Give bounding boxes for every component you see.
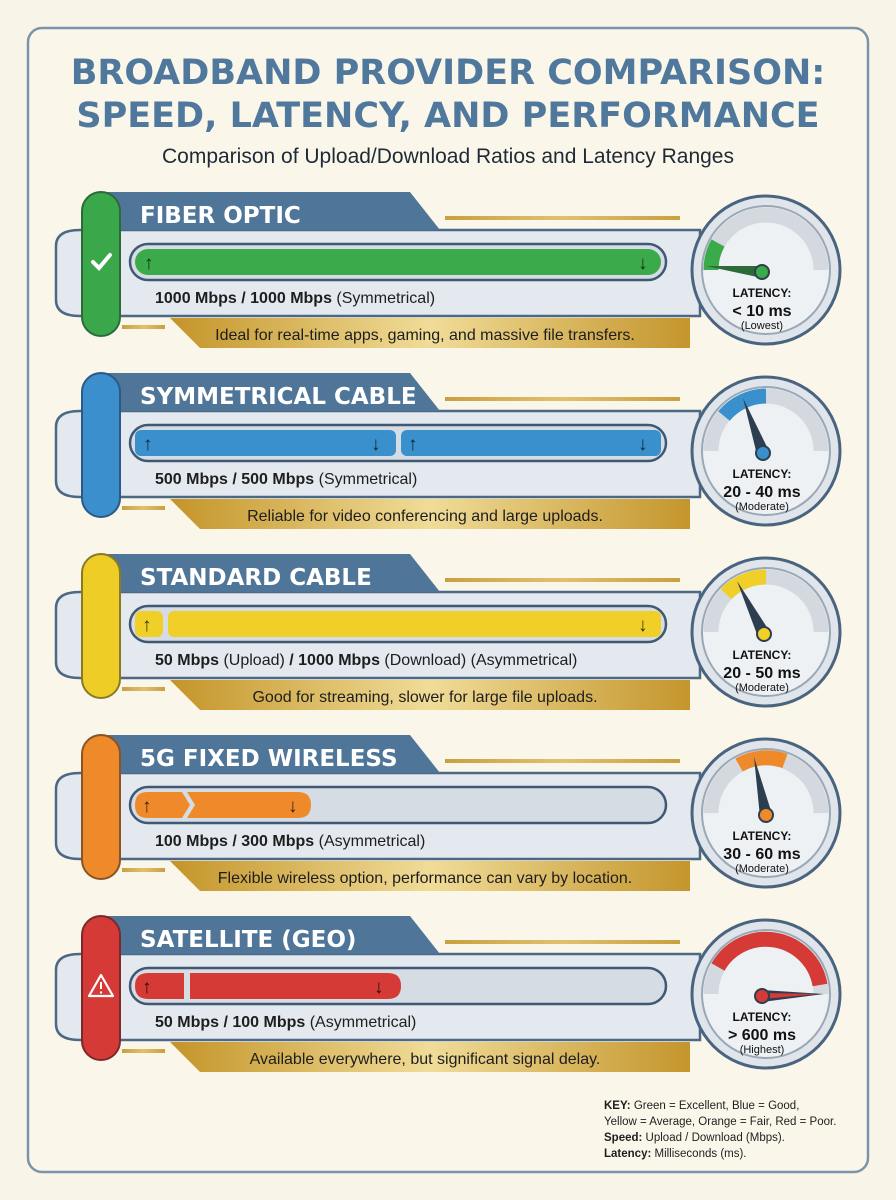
speed bar: [130, 787, 666, 823]
panel: standard cable: [56, 554, 840, 710]
panel: satellite: [56, 916, 840, 1072]
speed bar: ↑: [142, 796, 152, 817]
heading: fiber optic: FIBER OPTIC: [140, 203, 301, 229]
description: Flexible wireless option, performance can vary by location.: [218, 870, 632, 887]
description: Ideal for real-time apps, gaming, and massive file transfers.: [215, 327, 635, 344]
gauge: (Moderate): [735, 863, 789, 875]
title: [71, 53, 825, 136]
speed bar: ↑: [142, 977, 152, 998]
speed text: 100 Mbps / 300 Mbps (Asymmetrical): [155, 833, 425, 850]
speed bar: [130, 425, 666, 461]
gauge: LATENCY:: [733, 286, 791, 300]
title: SPEED, LATENCY, AND PERFORMANCE: [76, 96, 820, 136]
speed bar: ↑: [143, 434, 152, 455]
gauge: 20 - 50 ms: [723, 665, 801, 682]
gauge: [692, 739, 840, 887]
gauge: LATENCY:: [733, 467, 791, 481]
heading: 5g fixed wireless: 5G FIXED WIRELESS: [140, 746, 398, 772]
gauge: LATENCY:: [733, 648, 791, 662]
speed bar: [130, 606, 666, 642]
icon: check: [93, 255, 110, 268]
speed bar: ↑: [408, 434, 418, 455]
gauge: (Lowest): [741, 320, 783, 332]
gauge: < 10 ms: [732, 303, 792, 320]
gauge: [692, 377, 840, 525]
description: Good for streaming, slower for large file uploads.: [252, 689, 598, 706]
speed bar: ↓: [374, 977, 384, 998]
description: Available everywhere, but significant signal delay.: [250, 1051, 600, 1068]
gauge: [692, 558, 840, 706]
speed bar: ↓: [638, 434, 648, 455]
speed bar: ↑: [144, 253, 154, 274]
speed bar: ↑: [142, 615, 152, 636]
gauge: [692, 920, 840, 1068]
speed bar: ↓: [288, 796, 298, 817]
heading: standard cable: STANDARD CABLE: [140, 565, 372, 591]
gauge: LATENCY:: [733, 829, 791, 843]
panel: 5g fixed wireless: [56, 735, 840, 891]
key legend: KEY: Green = Excellent, Blue = Good,: [604, 1100, 799, 1112]
heading: satellite: SATELLITE (GEO): [140, 927, 356, 953]
speed bar: ↓: [638, 253, 648, 274]
key legend: Latency: Milliseconds (ms).: [604, 1148, 747, 1160]
gauge: LATENCY:: [733, 1010, 791, 1024]
title: BROADBAND PROVIDER COMPARISON:: [71, 53, 825, 93]
key legend: Speed: Upload / Download (Mbps).: [604, 1132, 785, 1144]
gauge: > 600 ms: [728, 1027, 796, 1044]
panel: fiber optic: [56, 192, 840, 348]
speed bar: ↓: [371, 434, 380, 455]
heading: symmetrical cable: SYMMETRICAL CABLE: [140, 384, 417, 410]
speed text: 50 Mbps (Upload) / 1000 Mbps (Download) (Asymmetrical): [155, 652, 577, 669]
key legend: [604, 1100, 836, 1160]
speed text: 500 Mbps / 500 Mbps (Symmetrical): [155, 471, 417, 488]
key legend: Yellow = Average, Orange = Fair, Red = Poor.: [604, 1116, 836, 1128]
speed text: 1000 Mbps / 1000 Mbps (Symmetrical): [155, 290, 435, 307]
icon: warning: [89, 975, 113, 996]
speed bar: [130, 968, 666, 1004]
gauge: 30 - 60 ms: [723, 846, 801, 863]
speed bar: ↓: [638, 615, 648, 636]
gauge: [692, 196, 840, 344]
subtitle: Comparison of Upload/Download Ratios and Latency Ranges: [162, 145, 734, 168]
description: Reliable for video conferencing and large uploads.: [247, 508, 603, 525]
gauge: (Moderate): [735, 682, 789, 694]
gauge: (Highest): [740, 1044, 784, 1056]
gauge: 20 - 40 ms: [723, 484, 801, 501]
gauge: (Moderate): [735, 501, 789, 513]
speed text: 50 Mbps / 100 Mbps (Asymmetrical): [155, 1014, 416, 1031]
panel: symmetrical cable: [56, 373, 840, 529]
speed bar: [130, 244, 666, 280]
